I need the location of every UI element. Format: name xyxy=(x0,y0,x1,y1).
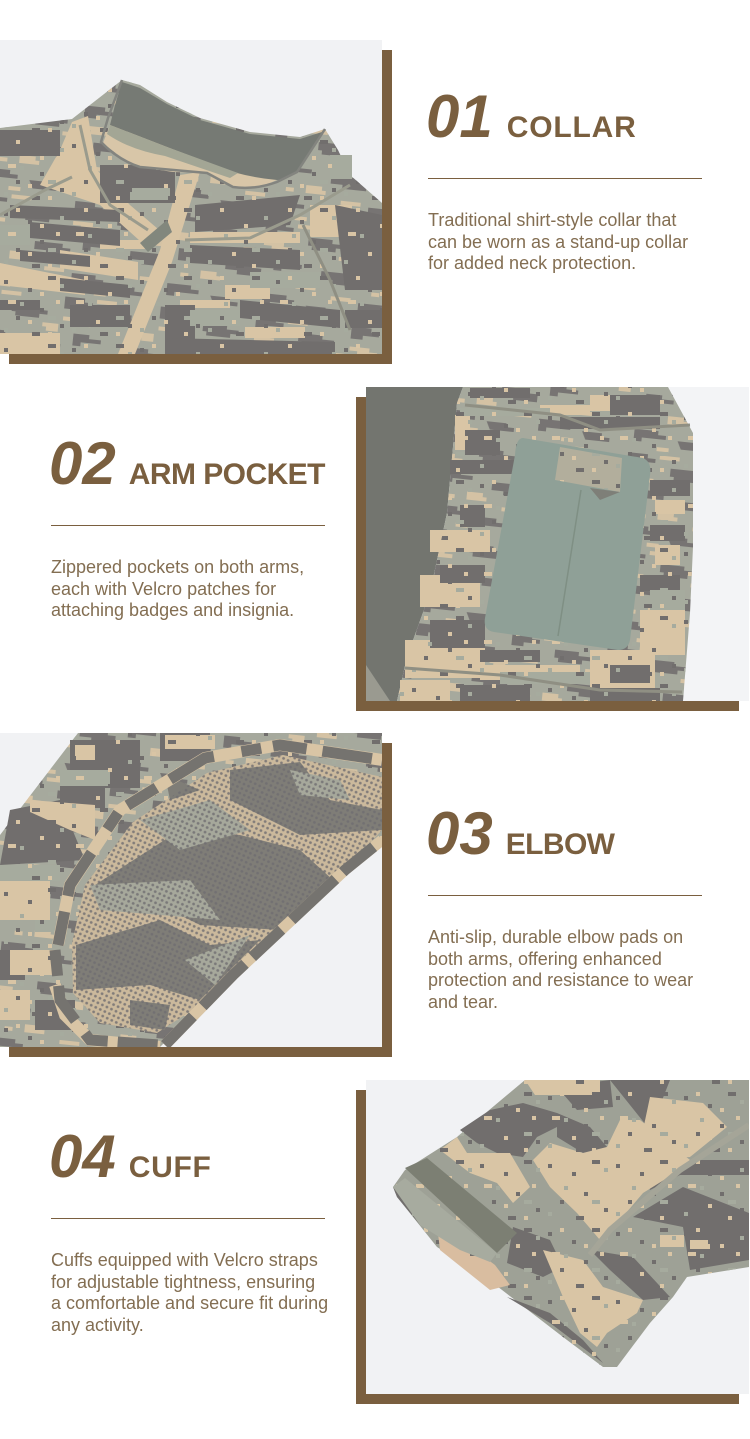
heading: 04 cuff: 04 CUFF xyxy=(49,1123,212,1190)
section: elbow xyxy=(0,733,702,1057)
photo: cuff xyxy=(366,1080,749,1394)
description: elbow: both arms, offering enhanced xyxy=(428,949,662,969)
description: arm pocket: each with Velcro patches for xyxy=(51,579,276,599)
heading: 01 collar: 01 COLLAR xyxy=(426,83,637,150)
heading: 02 arm pocket: 02 ARM POCKET xyxy=(49,430,325,497)
heading: 03 elbow: 03 ELBOW xyxy=(426,800,614,867)
divider xyxy=(428,895,702,896)
section: cuff xyxy=(49,1080,749,1404)
photo: arm pocket xyxy=(366,387,749,701)
brown frame xyxy=(9,743,392,1057)
brown frame xyxy=(9,50,392,364)
description: collar: for added neck protection. xyxy=(428,253,636,273)
description: cuff: Cuffs equipped with Velcro straps xyxy=(51,1250,318,1270)
description: cuff: a comfortable and secure fit during xyxy=(51,1293,328,1313)
description: cuff xyxy=(51,1250,328,1335)
description: arm pocket xyxy=(51,557,304,620)
description: elbow: and tear. xyxy=(428,992,498,1012)
description: elbow: Anti-slip, durable elbow pads on xyxy=(428,927,683,947)
photo: elbow xyxy=(0,733,382,1047)
divider xyxy=(428,178,702,179)
description: collar: can be worn as a stand-up collar xyxy=(428,232,688,252)
description: elbow: protection and resistance to wear xyxy=(428,970,693,990)
photo: collar xyxy=(0,40,382,354)
description: cuff: any activity. xyxy=(51,1315,144,1335)
section: collar xyxy=(0,40,702,364)
brown frame xyxy=(356,397,739,711)
section: arm pocket xyxy=(49,387,749,711)
description: collar: Traditional shirt-style collar that xyxy=(428,210,676,230)
description: arm pocket: Zippered pockets on both arms, xyxy=(51,557,304,577)
divider xyxy=(51,1218,325,1219)
description: arm pocket: attaching badges and insignia. xyxy=(51,600,294,620)
description: elbow xyxy=(428,927,693,1012)
divider xyxy=(51,525,325,526)
description: cuff: for adjustable tightness, ensuring xyxy=(51,1272,315,1292)
brown frame xyxy=(356,1090,739,1404)
description: collar xyxy=(428,210,688,273)
